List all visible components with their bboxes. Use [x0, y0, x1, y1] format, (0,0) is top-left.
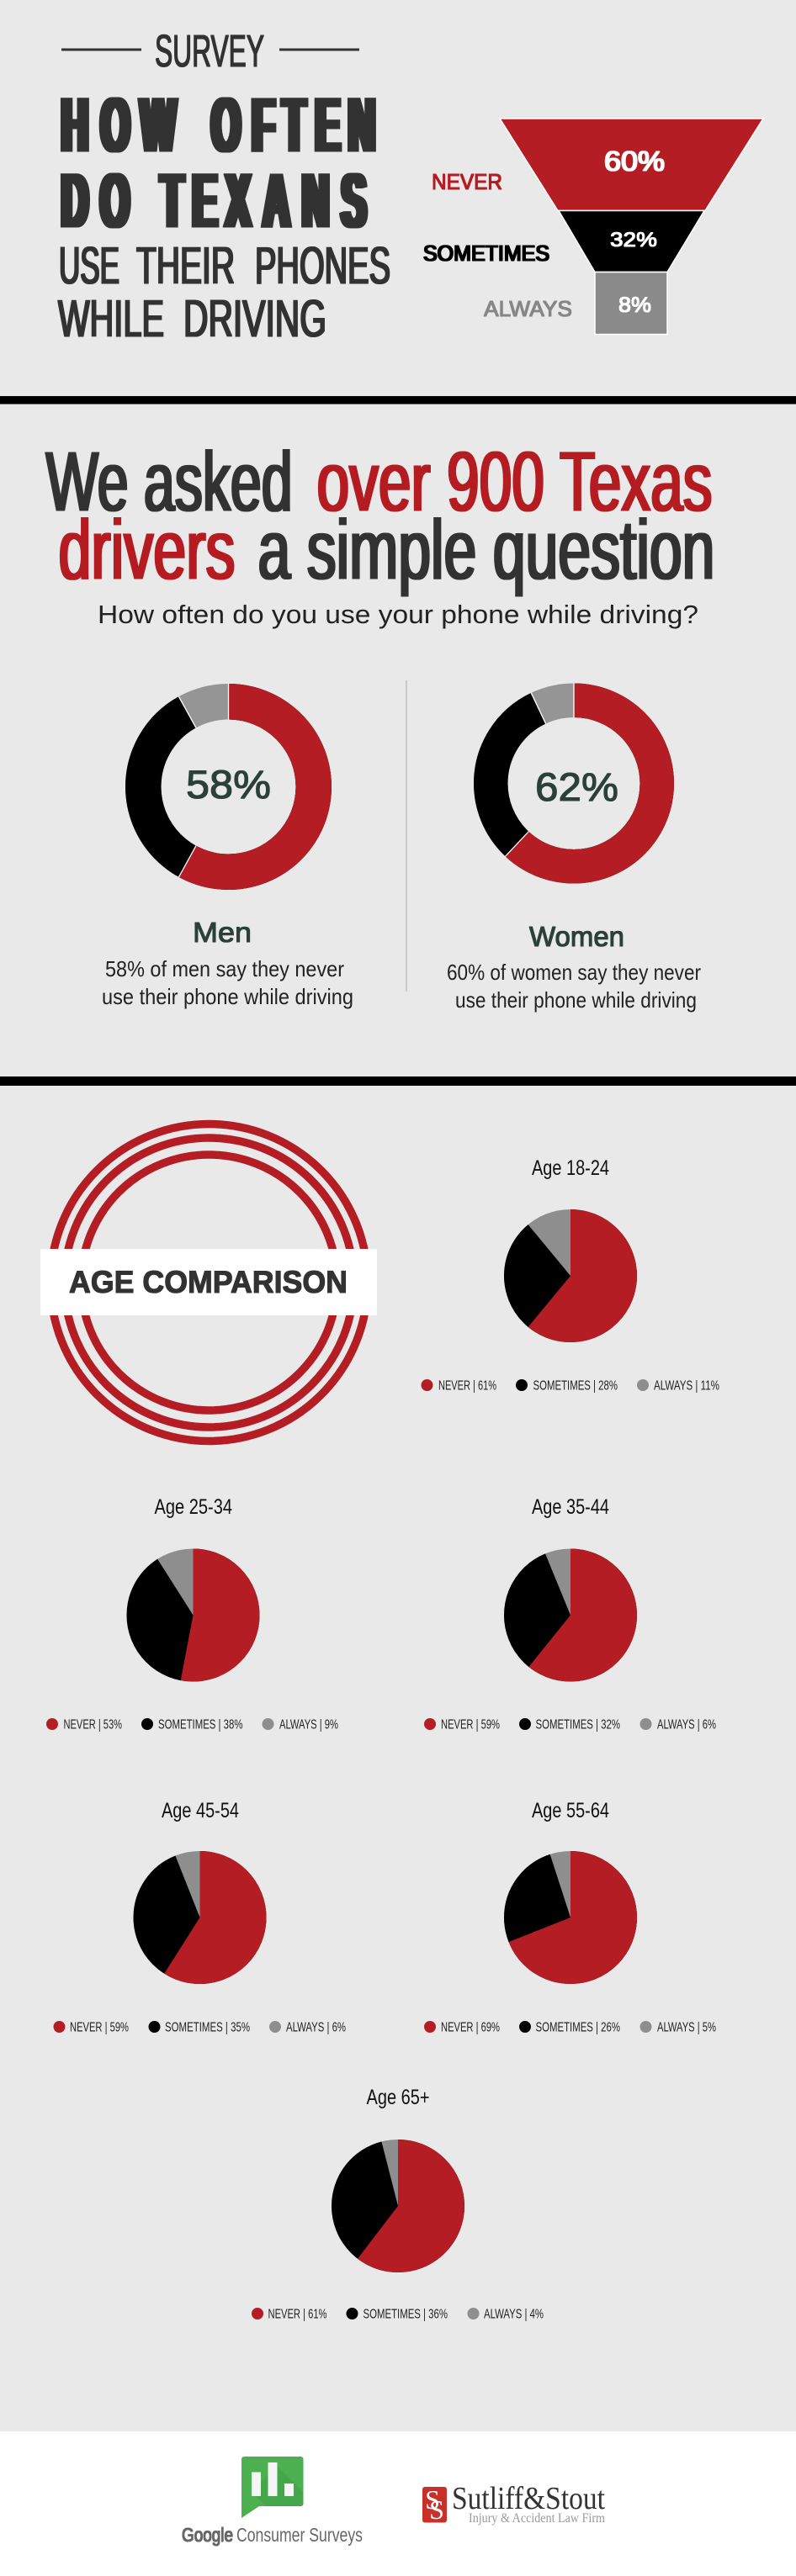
panel: survey question and gender results — [45, 435, 715, 1013]
pie chart: age 65+ — [252, 2086, 544, 2321]
panel: age comparison — [40, 1124, 719, 2321]
question text: How often do you use your phone while driving? — [98, 600, 698, 629]
funnel labels: ALWAYS — [484, 296, 572, 321]
subtitle: use their phones while driving: USE — [59, 237, 119, 295]
eyebrow: survey — [61, 26, 359, 77]
legend: age 45-54: SOMETIMES | 35% — [165, 2020, 250, 2035]
text block: women: use their phone while driving — [455, 987, 697, 1013]
title: how often do texans: DO TEXANS — [61, 158, 366, 244]
subtitle: use their phones while driving — [58, 237, 390, 348]
text block: women: Women — [529, 921, 624, 952]
donut chart: men: 58% — [186, 762, 271, 807]
panel: survey header — [58, 26, 763, 348]
legend: age 25-34: SOMETIMES | 38% — [158, 1717, 242, 1732]
text block: men: Men — [193, 917, 252, 948]
pie chart: age 25-34 — [46, 1495, 338, 1732]
legend: age 65+: ALWAYS | 4% — [484, 2308, 544, 2321]
logo: sutliff and stout: S — [425, 2484, 440, 2515]
legend: age 65+ — [252, 2308, 544, 2321]
funnel chart: 60% — [604, 145, 665, 177]
legend: age 55-64: ALWAYS | 5% — [657, 2020, 716, 2035]
badge: age comparison — [40, 1124, 377, 1441]
legend: age 35-44: SOMETIMES | 32% — [535, 1717, 620, 1732]
funnel chart: 32% — [610, 229, 657, 251]
subtitle: use their phones while driving: DRIVING — [183, 290, 326, 348]
eyebrow: survey: SURVEY — [155, 26, 264, 77]
pie chart: age 55-64: Age 55-64 — [532, 1799, 609, 1822]
pie chart: age 65+: Age 65+ — [367, 2086, 429, 2109]
panel: footer logos — [0, 2431, 796, 2576]
pie chart: age 25-34: Age 25-34 — [155, 1495, 232, 1519]
pie chart: age 45-54 — [54, 1799, 346, 2035]
legend: age 65+: NEVER | 61% — [268, 2308, 326, 2321]
pie chart: age 18-24 — [421, 1156, 719, 1393]
logo: google consumer surveys: Google — [182, 2524, 233, 2546]
text block: men — [102, 917, 353, 1009]
legend: age 35-44: ALWAYS | 6% — [657, 1717, 716, 1732]
legend: age 55-64: NEVER | 69% — [441, 2020, 500, 2035]
funnel labels: SOMETIMES — [423, 241, 549, 266]
legend: age 25-34: NEVER | 53% — [64, 1717, 122, 1732]
donut chart: women: 62% — [535, 764, 618, 809]
logo: sutliff and stout: Injury & Accident Law Firm — [469, 2511, 605, 2526]
logo: sutliff and stout — [422, 2481, 605, 2526]
pie chart: age 45-54: Age 45-54 — [162, 1799, 239, 1822]
legend: age 65+: SOMETIMES | 36% — [364, 2308, 448, 2321]
legend: age 45-54 — [54, 2020, 346, 2035]
funnel labels: NEVER — [432, 169, 502, 194]
funnel chart: 8% — [618, 294, 651, 317]
logo: sutliff and stout: Sutliff&Stout — [452, 2481, 605, 2516]
donut chart: men — [143, 684, 314, 877]
funnel chart — [500, 119, 763, 335]
subtitle: use their phones while driving: PHONES — [255, 237, 390, 295]
funnel labels — [423, 169, 572, 321]
legend: age 25-34: ALWAYS | 9% — [279, 1717, 338, 1732]
legend: age 25-34 — [46, 1717, 338, 1732]
title: how often do texans: HOW OFTEN — [61, 82, 375, 168]
pie chart: age 35-44: Age 35-44 — [532, 1495, 609, 1519]
text block: women: 60% of women say they never — [447, 960, 701, 985]
legend: age 45-54: ALWAYS | 6% — [286, 2020, 346, 2035]
legend: age 35-44 — [424, 1717, 716, 1732]
subtitle: use their phones while driving: WHILE — [58, 290, 164, 348]
title: how often do texans — [61, 82, 375, 244]
donut chart: women — [491, 683, 657, 866]
text block: men: use their phone while driving — [102, 984, 353, 1009]
logo: google consumer surveys: Consumer Surveys — [236, 2524, 363, 2546]
text block: men: 58% of men say they never — [105, 956, 344, 981]
heading: we asked over 900 texas drivers a simple question: We asked — [45, 435, 293, 529]
subtitle: use their phones while driving: THEIR — [136, 237, 235, 295]
heading: we asked over 900 texas drivers a simple question — [45, 435, 715, 597]
legend: age 55-64 — [424, 2020, 716, 2035]
logo: sutliff and stout: S — [429, 2494, 444, 2525]
badge: age comparison: AGE COMPARISON — [69, 1265, 348, 1299]
legend: age 18-24: NEVER | 61% — [438, 1379, 496, 1393]
legend: age 18-24: SOMETIMES | 28% — [533, 1379, 618, 1393]
legend: age 18-24: ALWAYS | 11% — [654, 1379, 719, 1393]
logo: google consumer surveys — [182, 2457, 363, 2546]
pie chart: age 35-44 — [424, 1495, 716, 1732]
legend: age 35-44: NEVER | 59% — [441, 1717, 500, 1732]
legend: age 45-54: NEVER | 59% — [70, 2020, 129, 2035]
legend: age 55-64: SOMETIMES | 26% — [535, 2020, 620, 2035]
text block: women — [447, 921, 701, 1013]
heading: we asked over 900 texas drivers a simple question: drivers — [59, 503, 236, 597]
pie chart: age 55-64 — [424, 1799, 716, 2035]
divider — [406, 680, 407, 992]
pie chart: age 18-24: Age 18-24 — [532, 1156, 609, 1180]
legend: age 18-24 — [421, 1379, 719, 1393]
